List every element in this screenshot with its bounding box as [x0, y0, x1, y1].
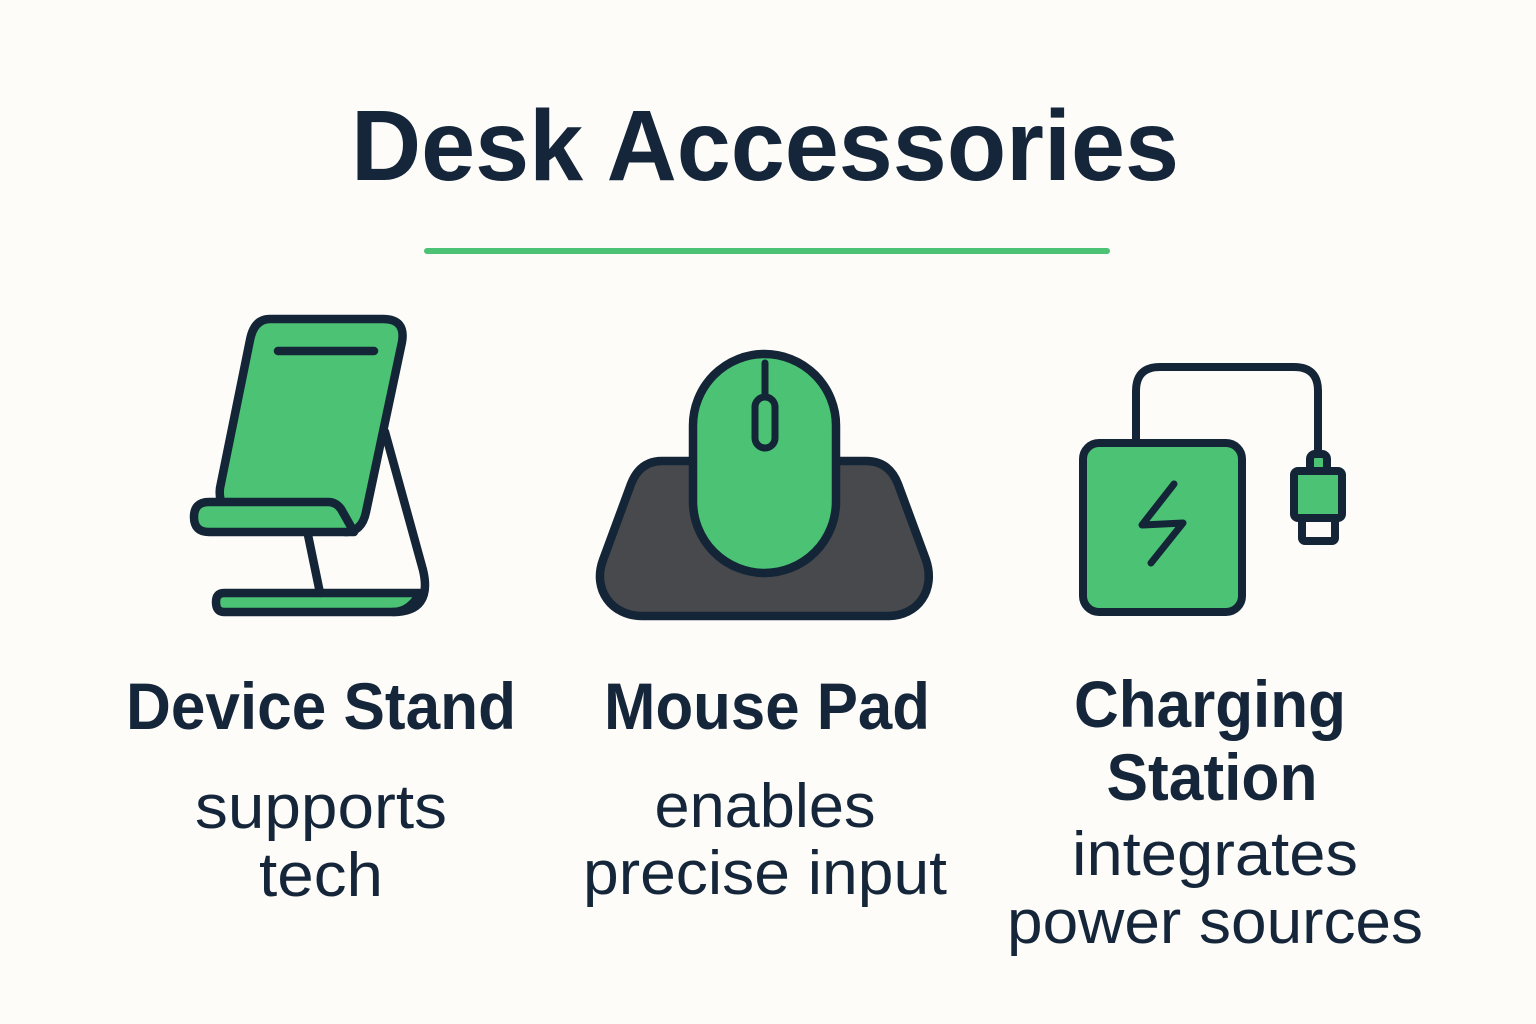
label: mouse pad: precise input	[583, 839, 947, 908]
title: Desk Accessories	[351, 90, 1179, 202]
label: device stand	[126, 669, 516, 910]
label: mouse pad: enables	[654, 772, 876, 841]
label: mouse pad	[583, 669, 947, 908]
label: charging station: integrates	[1072, 820, 1358, 889]
label: mouse pad: Mouse Pad	[604, 669, 930, 743]
icon: mouse pad	[600, 354, 929, 616]
label: device stand: supports	[195, 773, 447, 842]
label: charging station: power sources	[1007, 888, 1423, 957]
label: device stand: tech	[259, 841, 383, 910]
label: charging station: Charging	[1074, 667, 1346, 741]
label: charging station: Station	[1106, 740, 1318, 814]
label: device stand: Device Stand	[126, 669, 516, 743]
icon: device stand	[194, 319, 425, 612]
label: charging station	[1007, 667, 1423, 957]
icon: charging station	[1083, 367, 1342, 612]
